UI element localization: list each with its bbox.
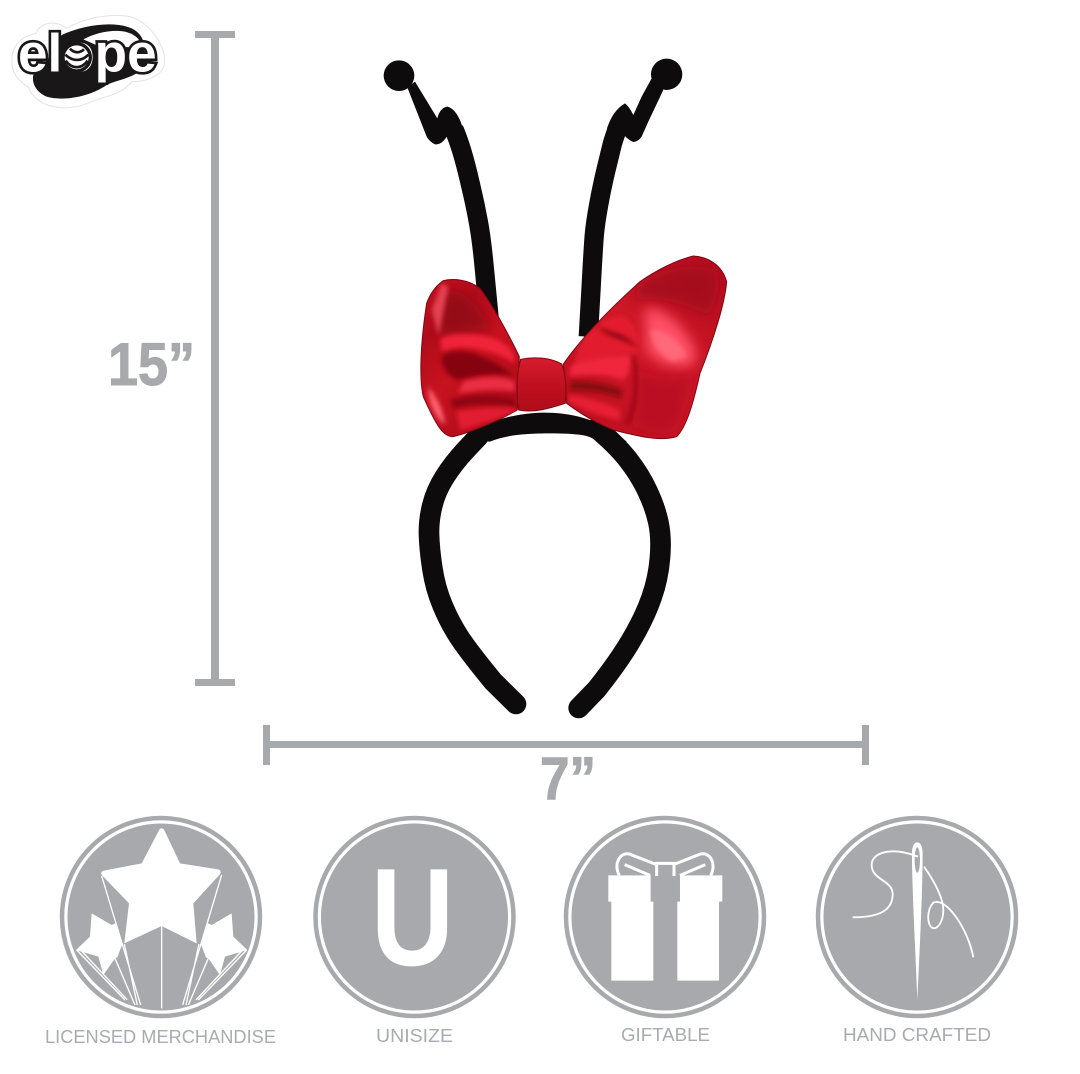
- height label: 15”: [108, 331, 195, 398]
- icon: needle and thread: [853, 842, 973, 1000]
- logo white crescent: [83, 31, 143, 47]
- logo sticker outline: [12, 15, 165, 108]
- left bow lobe: [421, 280, 519, 437]
- badge: giftable: [566, 818, 764, 1016]
- headband product photo: [384, 59, 727, 708]
- height dimension line: 15 inches: [195, 31, 235, 686]
- badge circle: [818, 818, 1016, 1016]
- icon: letter U: U: [371, 840, 454, 995]
- right antenna: [588, 59, 682, 337]
- badge circle: [62, 818, 260, 1016]
- label: giftable: GIFTABLE: [621, 1024, 710, 1045]
- label: unisize: UNISIZE: [376, 1025, 453, 1046]
- icon: gift box: [608, 854, 722, 981]
- red metallic bow: [421, 256, 727, 439]
- icon: stars with rays: [76, 828, 247, 1008]
- bow knot: [517, 358, 566, 411]
- width dimension line: 7 inches: [263, 725, 869, 765]
- headband loop: [429, 413, 661, 708]
- width label: 7”: [540, 745, 596, 812]
- logo wordmark: elope: [18, 24, 157, 83]
- label: licensed merchandise: LICENSED MERCHANDISE: [45, 1026, 276, 1047]
- badge: unisize: [316, 818, 514, 1016]
- logo swirl ball: [61, 42, 92, 73]
- logo: elope: [12, 15, 165, 108]
- badge: licensed merchandise: [62, 818, 260, 1016]
- label: hand crafted: HAND CRAFTED: [843, 1024, 991, 1045]
- badge: hand crafted: [818, 818, 1016, 1016]
- logo black swoosh: [33, 24, 147, 99]
- left antenna: [384, 60, 489, 320]
- right bow lobe: [563, 256, 727, 439]
- badge circle: [316, 818, 514, 1016]
- badge circle: [566, 818, 764, 1016]
